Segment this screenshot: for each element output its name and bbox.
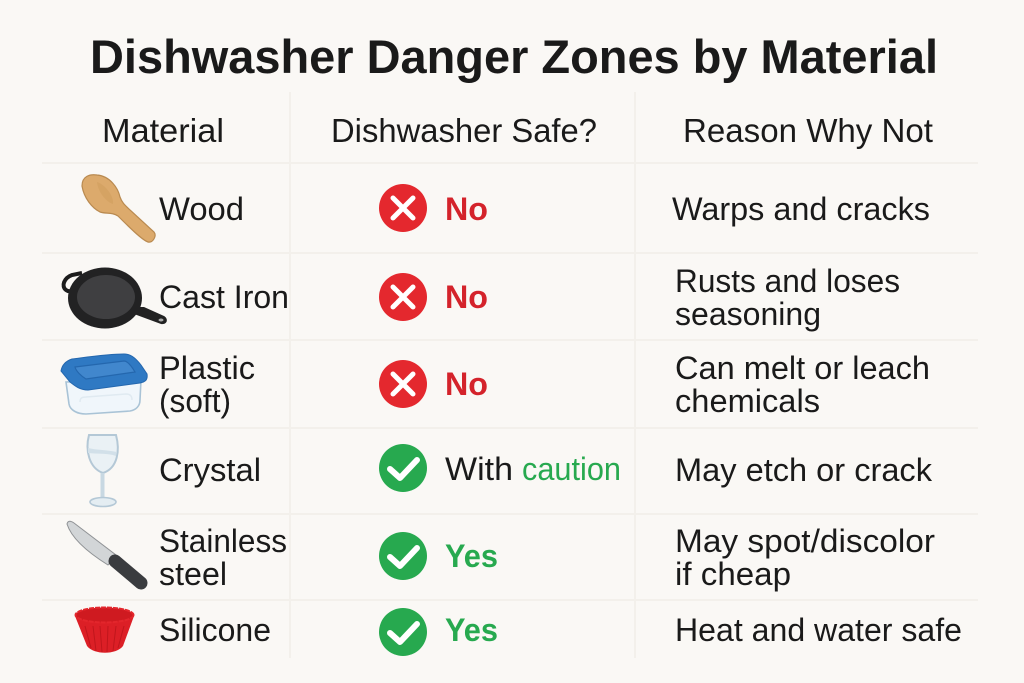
reason: cast iron: seasoning (675, 296, 821, 332)
reason: plastic (675, 350, 930, 419)
label: crystal: Crystal (159, 452, 261, 488)
reason: stainless steel: May spot/discolor (675, 523, 935, 559)
title: Dishwasher Danger Zones by Material (90, 30, 938, 83)
status: no: No (445, 366, 488, 402)
status: no: No (445, 191, 488, 227)
label: plastic soft: Plastic (159, 350, 255, 386)
row: stainless steel (67, 521, 935, 592)
reason: crystal: May etch or crack (675, 452, 933, 488)
header: reason why not: Reason Why Not (683, 112, 933, 149)
status: yes: Yes (445, 538, 498, 574)
label: silicone: Silicone (159, 612, 271, 648)
status: with caution: caution (522, 451, 621, 487)
status: no (379, 273, 488, 321)
status: no (379, 360, 488, 408)
label: stainless steel: Stainless (159, 523, 287, 559)
label: wood: Wood (159, 191, 244, 227)
icon: cast iron skillet (64, 268, 167, 328)
status: yes: Yes (445, 612, 498, 648)
reason: cast iron: Rusts and loses (675, 263, 900, 299)
reason: wood: Warps and cracks (672, 191, 930, 227)
status: yes (379, 532, 498, 580)
reason: cast iron (675, 263, 900, 332)
icon: wooden spoon (82, 175, 155, 242)
column headers (102, 112, 933, 149)
reason: stainless steel (675, 523, 935, 592)
reason: stainless steel: if cheap (675, 556, 791, 592)
status: yes (379, 608, 498, 656)
icon: knife (67, 521, 141, 583)
reason: plastic: Can melt or leach (675, 350, 930, 386)
icon: plastic container (61, 354, 147, 414)
row: cast iron (64, 263, 900, 332)
reason: plastic: chemicals (675, 383, 820, 419)
status: with caution (379, 444, 621, 492)
status: no (379, 184, 488, 232)
reason: silicone: Heat and water safe (675, 612, 962, 648)
label: stainless steel (159, 523, 287, 592)
label: stainless steel: steel (159, 556, 227, 592)
header: material: Material (102, 112, 224, 149)
icon: wine glass (88, 435, 118, 506)
label: plastic soft: (soft) (159, 383, 231, 419)
row: silicone (75, 608, 962, 656)
label: plastic soft (159, 350, 255, 419)
status: no: No (445, 279, 488, 315)
row: plastic (61, 350, 930, 419)
row: wood (82, 175, 930, 242)
label: cast iron: Cast Iron (159, 279, 289, 315)
row: crystal (88, 435, 933, 506)
status: with caution: With (445, 451, 513, 487)
icon: silicone cupcake mold (75, 608, 134, 653)
header: dishwasher safe: Dishwasher Safe? (331, 112, 597, 149)
